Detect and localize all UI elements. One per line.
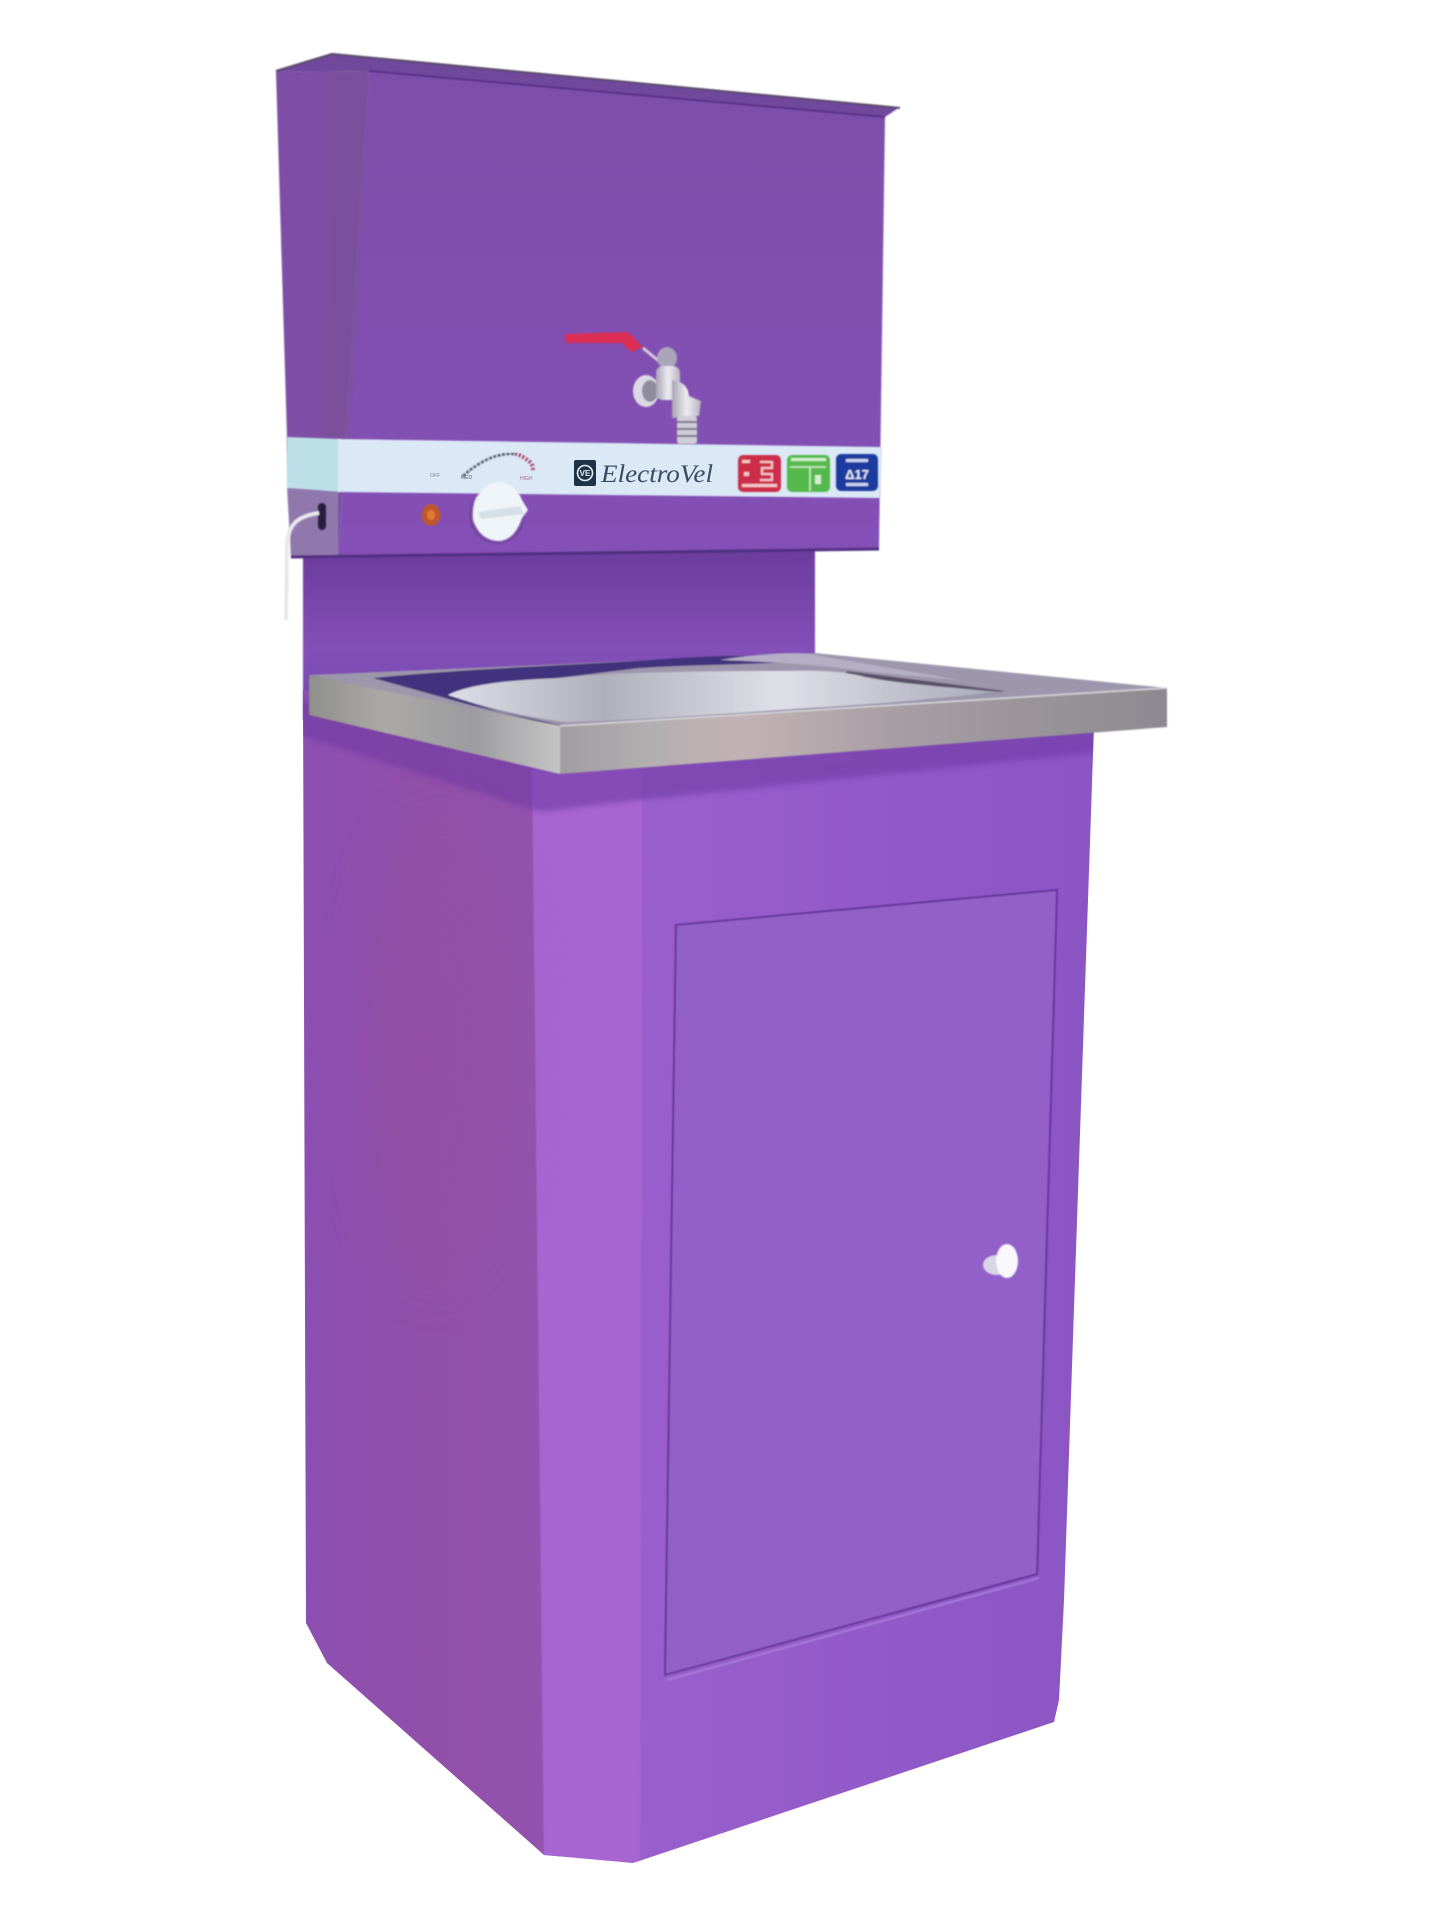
tank side texture band — [328, 71, 369, 437]
red badge — [738, 455, 781, 492]
red indicator lamp — [422, 504, 440, 526]
tap stem — [657, 347, 677, 369]
power cable — [286, 503, 326, 620]
green badge — [787, 455, 830, 492]
temperature scale arc — [463, 454, 533, 476]
housing left lower side — [287, 488, 338, 557]
thermostat dial knob — [469, 482, 528, 544]
valve flange — [633, 375, 659, 407]
cabinet body — [300, 690, 1100, 1870]
lower back panel — [303, 545, 815, 720]
blue badge: Δ17 — [845, 467, 869, 482]
cabinet left side — [300, 690, 560, 1870]
wash stand product photo — [276, 53, 1167, 1870]
sink right front face — [560, 688, 1167, 774]
scale labels: OFF — [430, 473, 440, 479]
strip front — [338, 439, 882, 498]
tank front — [338, 71, 885, 557]
sink left front face — [309, 675, 560, 774]
scale labels: HIGH — [520, 476, 533, 482]
tank lid — [276, 53, 900, 117]
spout — [672, 380, 701, 418]
cabinet door — [665, 890, 1057, 1680]
sink right inner edge shadow — [845, 671, 1005, 694]
water tap with red handle — [565, 332, 701, 444]
sink basin far side highlight — [720, 653, 960, 680]
sink basin — [448, 671, 1000, 722]
scale labels — [430, 473, 533, 482]
cabinet front — [630, 720, 1100, 1870]
warm tone on cabinet side — [370, 820, 510, 1280]
tank left side — [276, 71, 369, 557]
scale labels: MED — [461, 475, 472, 481]
hose nipple — [677, 416, 697, 444]
control label strip — [287, 437, 882, 498]
cabinet chamfered corner — [532, 760, 642, 1870]
ElectroVel wordmark: ElectroVel — [600, 461, 713, 488]
housing lower edge — [291, 549, 879, 557]
door knob — [983, 1244, 1018, 1278]
shadow under sink — [300, 700, 1100, 812]
ElectroVel logo mark: VE — [580, 469, 591, 478]
sink rim highlight — [560, 688, 1167, 726]
sink top surface — [309, 653, 1167, 726]
stainless steel sink — [309, 653, 1167, 774]
strip side — [287, 437, 340, 492]
red lever — [565, 332, 643, 352]
sink dark back wall — [373, 656, 815, 726]
blue badge — [836, 454, 878, 491]
ElectroVel logo mark — [574, 460, 596, 486]
upper water tank — [276, 53, 900, 557]
